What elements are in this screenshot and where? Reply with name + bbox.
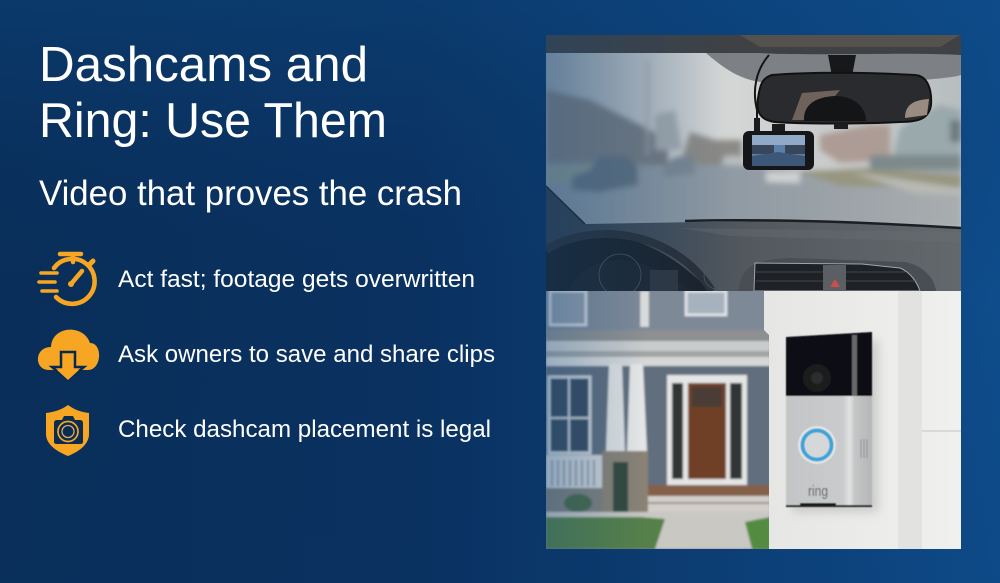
icon: stopwatch <box>39 254 95 304</box>
street scene <box>546 60 961 228</box>
title <box>39 38 387 148</box>
parked cars <box>572 156 638 192</box>
steering wheel and cluster <box>546 234 730 296</box>
ring doorbell <box>786 332 872 507</box>
title: Dashcams and <box>39 38 368 92</box>
mirror mount and cable <box>828 55 856 72</box>
white wall <box>764 291 961 549</box>
logo: ring: ring <box>808 483 828 500</box>
photo: ring doorbell on house <box>546 291 961 549</box>
list item: check placement <box>46 405 491 456</box>
list item: ask owners <box>38 330 495 380</box>
list item: act fast <box>39 254 475 304</box>
icon: cloud download <box>38 330 99 380</box>
headliner <box>546 35 961 55</box>
dashboard <box>546 186 961 291</box>
title: Ring: Use Them <box>39 94 387 148</box>
rear-view mirror <box>758 73 931 129</box>
photo: dashcam on windshield <box>546 35 961 296</box>
dashcam <box>743 124 814 170</box>
air vent <box>754 263 920 291</box>
subtitle: Video that proves the crash <box>39 174 462 213</box>
text: act fast: Act fast; footage gets overwritten <box>118 266 475 293</box>
text: check placement: Check dashcam placement is legal <box>118 416 491 443</box>
windshield frit <box>706 53 961 82</box>
icon: camera shield <box>46 405 89 456</box>
house front <box>546 291 770 549</box>
text: ask owners: Ask owners to save and share clips <box>118 341 495 368</box>
